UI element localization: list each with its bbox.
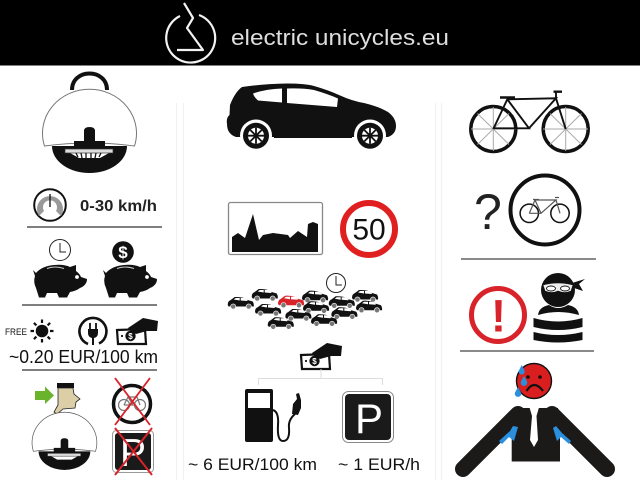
fuel cost: ~ 6 EUR/100 km: [188, 456, 317, 474]
icon: traffic clock: [326, 274, 346, 292]
icon: paying hand: [117, 318, 158, 344]
free label: FREE: [5, 327, 27, 338]
icon: paying hand: [301, 343, 342, 369]
icon: bicycle: [471, 92, 588, 152]
speed label: 0-30 km/h: [80, 198, 157, 215]
icon: sweating sad face: [515, 364, 552, 398]
icon: parking sign: P: [355, 395, 383, 442]
icon: thief: [534, 273, 585, 342]
column dividers: [176, 103, 442, 480]
icon: electric unicycle: [42, 74, 136, 173]
speed gauge: [34, 189, 66, 221]
question mark: ?: [474, 184, 502, 240]
icon: parking sign: [342, 392, 394, 442]
cost bracket: [258, 369, 382, 385]
icon: clock and piggy bank: [33, 240, 87, 298]
icon: dollar and piggy bank: $: [118, 243, 128, 262]
icon: warning exclamation: [472, 288, 524, 342]
icon: no bicycle lane: [114, 378, 150, 425]
icon: bicycle path sign: [510, 176, 580, 244]
icon: green arrow: [35, 386, 54, 404]
icon: dollar and piggy bank: [103, 241, 157, 298]
icon: built-up area sign: [228, 202, 322, 254]
icon: car: [227, 84, 396, 152]
electric cost: ~0.20 EUR/100 km: [9, 347, 158, 367]
icon: small unicycle: [32, 412, 97, 470]
icon: speed limit 50: 50: [352, 214, 386, 246]
logo: [166, 3, 215, 63]
icon: no parking: [112, 428, 154, 475]
icon: warning exclamation: !: [491, 290, 506, 342]
traffic jam of cars: [228, 289, 382, 329]
icon: suited man with sweat patches: [463, 408, 607, 469]
header bar: [0, 0, 640, 66]
icon: sun: [30, 320, 54, 342]
icon: speed limit 50: [343, 203, 395, 255]
parking cost: ~ 1 EUR/h: [338, 456, 420, 474]
icon: hand carrying: [54, 383, 80, 414]
icon: fuel pump: [245, 389, 301, 442]
icon: no parking: P: [120, 432, 146, 475]
icon: plug: [79, 318, 106, 345]
site name: electric unicycles.eu: [231, 25, 449, 50]
